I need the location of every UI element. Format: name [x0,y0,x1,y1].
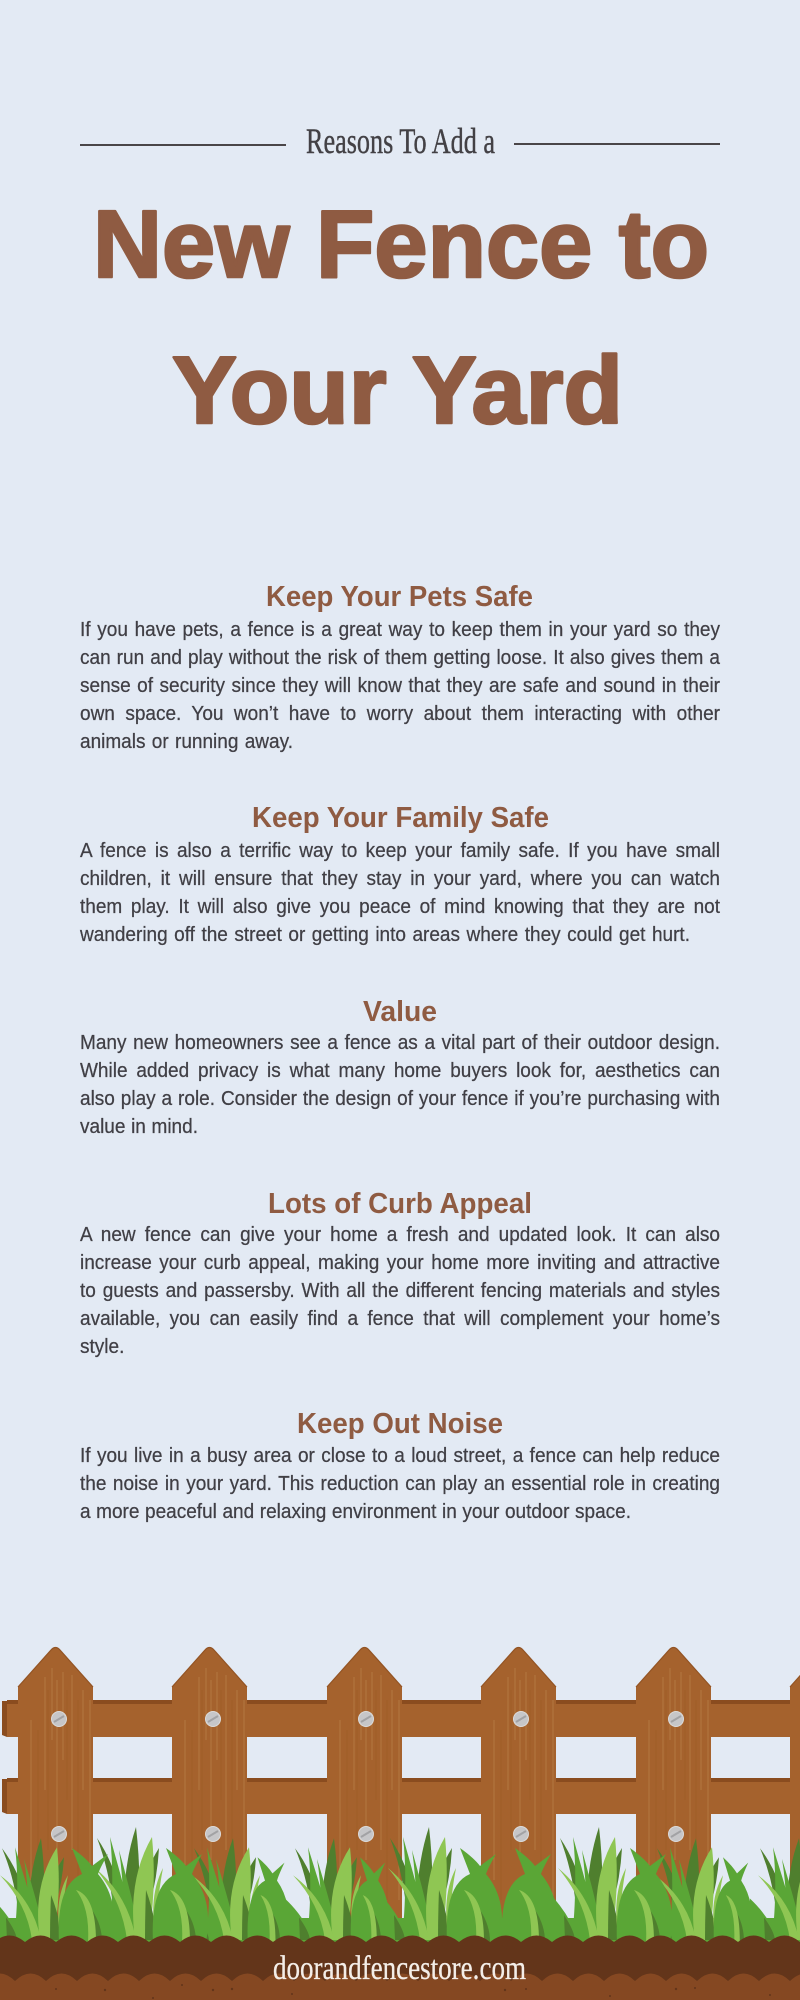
text block: pets: own space. You won’t have to worry about them interacting with other [80,703,720,725]
text block: curb appeal: style. [80,1336,124,1358]
heading: lots of curb appeal: Lots of Curb Appeal [268,1188,532,1220]
text block: curb appeal: increase your curb appeal, making your home more inviting and attractive [80,1252,720,1274]
text block: family: children, it will ensure that they stay in your yard, where you can watch [80,868,720,890]
screws [52,1712,684,1842]
eyebrow text: Reasons To Add a [306,121,495,161]
eyebrow rule right [514,143,720,145]
title: New Fence to [93,191,709,298]
heading: keep out noise: Keep Out Noise [297,1408,503,1440]
panel: keep out noise [80,1408,720,1523]
fence posts [18,1648,800,1950]
text block: pets: If you have pets, a fence is a great way to keep them in your yard so they [80,619,720,641]
text block: value: value in mind. [80,1116,198,1138]
soil speckles [55,1984,771,1999]
text block: family: them play. It will also give you peace of mind knowing that they are not [80,896,720,918]
text block: noise: the noise in your yard. This reduction can play an essential role in creating [80,1473,720,1495]
title: Your Yard [172,337,623,444]
footer url: doorandfencestore.com [273,1950,526,1987]
text block: noise [80,1445,720,1523]
text block: pets: sense of security since they will know that they are safe and sound in their [80,675,720,697]
soil dark band [0,1936,800,2000]
text block: curb appeal: available, you can easily find a fence that will complement your home’s [80,1308,720,1330]
panel: lots of curb appeal [80,1188,720,1358]
panel: keep your family safe [80,802,720,946]
text block: noise: a more peaceful and relaxing environment in your outdoor space. [80,1501,631,1523]
header: eyebrow and title [80,121,720,444]
heading: keep your family safe: Keep Your Family Safe [252,802,549,834]
text block: curb appeal: A new fence can give your home a fresh and updated look. It can also [80,1224,720,1246]
text block: curb appeal: to guests and passersby. With all the different fencing materials and styles [80,1280,720,1302]
text block: value [80,1032,720,1138]
text block: pets: animals or running away. [80,731,293,753]
text block: value: While added privacy is what many home buyers look for, aesthetics can [80,1060,720,1082]
text block: noise: If you live in a busy area or close to a loud street, a fence can help reduce [80,1445,720,1467]
text block: family [80,840,720,946]
grass [0,1827,800,1945]
text block: value: Many new homeowners see a fence as a vital part of their outdoor design. [80,1032,720,1054]
heading: value: Value [363,996,437,1028]
text block: curb appeal [80,1224,720,1358]
panel: value [80,996,720,1138]
illustration: fence, grass and soil [0,1646,800,2000]
panel: keep your pets safe [80,581,720,753]
title [93,191,709,444]
text block: family: wandering off the street or getting into areas where they could get hurt. [80,924,690,946]
heading: keep your pets safe: Keep Your Pets Safe [266,581,533,613]
text block: pets [80,619,720,753]
text block: family: A fence is also a terrific way to keep your family safe. If you have small [80,840,720,862]
eyebrow rule left [80,144,286,146]
text block: pets: can run and play without the risk of them getting loose. It also gives them a [80,647,720,669]
soil light band [0,1974,800,2000]
fence rails [2,1700,800,1814]
text block: value: also play a role. Consider the design of your fence if you’re purchasing with [80,1088,720,1110]
